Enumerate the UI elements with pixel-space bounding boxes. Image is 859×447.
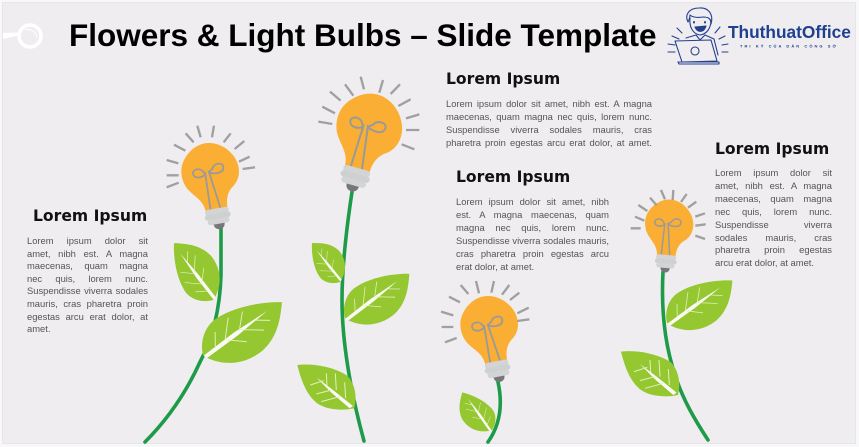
light bulb 2 [318,77,419,200]
body text: Lorem ipsum dolor sit amet, nibh [456,196,609,207]
light bulb 4 [631,190,706,275]
body text: maecenas, quam magna [715,193,832,204]
light bulb 1 [167,126,255,234]
body text: est. A magna maecenas, quam [456,209,609,220]
body text: Suspendisse viverra sodales [27,285,148,296]
icon: person with laptop [668,8,728,64]
body text: Suspendisse viverra sodales mauris, [456,235,609,246]
logo tagline: TRI KỶ CỦA DÂN CÔNG SỞ [740,44,838,48]
body text: pharetra proin egestas arcu erat dolor, at amet. [446,137,652,148]
text block: middle centre [456,168,609,272]
leaf: stem 4 lower [621,351,679,396]
body text [27,235,148,334]
body text: erat dolor, at amet. [456,261,534,272]
heading: Lorem Ipsum [715,140,829,158]
stem 3 [488,382,500,442]
light bulb 3 [441,281,529,387]
logo wordmark: ThuthuatOffice [728,22,851,42]
stem 4 [662,272,708,440]
body text: Suspendisse viverra sodales mauris, cras [446,124,652,135]
body text: maecenas, quam magna nec quis, lorem nunc. [446,111,652,122]
text block: top centre [446,70,652,148]
stem 1 [145,228,221,442]
body text: nec quis, lorem nunc. [715,206,832,217]
body text [446,98,652,148]
text block: right [715,140,832,268]
body text: magna nec quis, lorem nunc. [456,222,609,233]
body text [456,196,609,272]
leaf: stem 3 [449,384,502,440]
stem 2 [342,192,364,441]
body text: egestas arcu erat dolor, at [27,311,148,322]
body text: amet, nibh est. A magna [27,248,148,259]
body text: mauris, cras pharetra proin [27,298,148,309]
connector ring [3,25,41,47]
title: Flowers & Light Bulbs – Slide Template [69,17,657,53]
leaf: stem 1 lower [190,283,298,380]
body text: pharetra proin egestas [715,244,832,255]
body text: Lorem ipsum dolor sit amet, nibh est. A magna [446,98,652,109]
heading: Lorem Ipsum [446,70,560,88]
leaf: stem 4 upper [656,264,746,344]
body text: amet, nibh est. A magna [715,180,832,191]
body text: sodales mauris, cras [715,232,832,243]
heading: Lorem Ipsum [33,207,147,225]
leaf: stem 2 bottom [297,365,356,410]
body text [715,167,832,268]
leaf: stem 1 upper [159,230,232,310]
body text: Suspendisse viverra [715,219,832,230]
logo: ThuthuatOffice [668,8,851,64]
body text: amet. [27,323,50,334]
text block: left [27,207,148,334]
leaf: stem 2 top [301,233,354,290]
body text: cras pharetra proin egestas arcu [456,248,609,259]
body text: maecenas, quam magna [27,260,148,271]
body text: arcu erat dolor, at amet. [715,257,814,268]
body text: Lorem ipsum dolor sit [715,167,832,178]
body text: Lorem ipsum dolor sit [27,235,148,246]
leaf: stem 2 middle [334,258,423,339]
body text: nec quis, lorem nunc. [27,273,148,284]
heading: Lorem Ipsum [456,168,570,186]
